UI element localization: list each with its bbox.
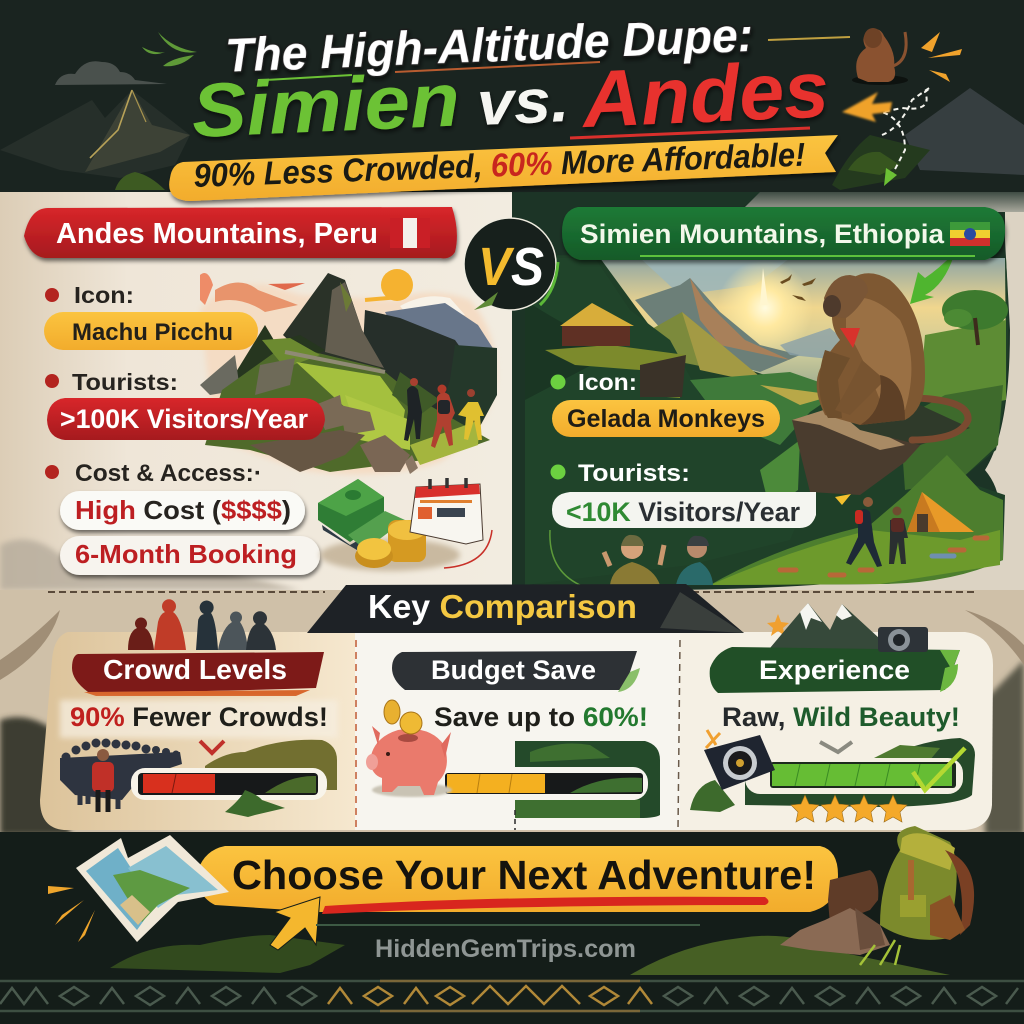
birds: [780, 274, 816, 301]
illustration: people silhouettes: [128, 599, 276, 650]
budget progress bar: [440, 767, 648, 800]
leaf: [225, 790, 285, 817]
crowd progress bar: [131, 768, 327, 800]
call to action banner: [198, 846, 838, 914]
foreground hill: [710, 455, 1003, 585]
right bushes and hill: [920, 320, 1006, 410]
arrow: green pointer: [910, 252, 955, 304]
hut cliff: [545, 345, 686, 398]
icon: small monkey: [852, 28, 908, 85]
VS badge: [464, 218, 558, 310]
stones: [780, 538, 987, 575]
text: Save up to 60%: Save up to 60%!: [434, 702, 648, 732]
illustration: Machu Picchu: [200, 269, 497, 474]
ribbon: Budget Save: [392, 651, 640, 692]
icon: camera: [704, 730, 775, 790]
icon: hut: [560, 303, 634, 326]
pill text: 6-Month Booking: [75, 539, 297, 569]
Simien header text: Simien Mountains, Ethiopia: [580, 219, 945, 249]
icon: Ethiopia flag: [950, 222, 990, 246]
left hillside: [525, 258, 840, 585]
title word: vs.: vs.: [476, 66, 571, 139]
hikers Simien: [835, 494, 908, 567]
icon: coins: [355, 520, 426, 568]
bullet: [45, 465, 59, 479]
terraces: [205, 345, 490, 472]
right panel top haze: [740, 192, 1024, 212]
stone ruins: [315, 395, 375, 435]
footer background: [0, 832, 1024, 1024]
ribbon text: 90% Less Crowded, 60% More Affordable!: [193, 136, 806, 194]
text backdrop: [60, 700, 338, 738]
text: Tourists Simien: [550, 460, 690, 487]
pill: Gelada Monkeys: [552, 400, 780, 437]
tree: [942, 290, 1008, 345]
label: Cost and Access: Cost & Access:·: [75, 460, 262, 487]
icon: cash stack: [318, 479, 460, 571]
Key Comparison banner: [307, 584, 744, 633]
sun: [717, 260, 813, 356]
title: Simien vs. Andes: [190, 44, 831, 154]
illustration: Simien landscape: [525, 252, 1008, 586]
pill: 6-Month Booking: [60, 536, 320, 575]
guides: [604, 535, 713, 585]
decorative title accent strokes: [266, 37, 850, 138]
pill text: High Cost ($$$$): [75, 495, 291, 525]
ribbon text: Experience: [759, 655, 910, 685]
rock ledge: [792, 405, 925, 495]
arrow: yellow pointer: [270, 897, 320, 950]
divider line: [316, 924, 700, 926]
ribbon text: Budget Save: [431, 655, 596, 685]
leaves: [690, 780, 735, 812]
monkey tail: [912, 398, 968, 440]
ribbon text: Crowd Levels: [103, 654, 287, 685]
panel: Simien Mountains: [525, 207, 1008, 586]
title word: Andes: Andes: [579, 44, 831, 144]
icon: Peru flag: [390, 218, 430, 248]
hill backdrop: [745, 738, 975, 807]
icon: gelada monkey: [817, 273, 925, 425]
pill text: Gelada Monkeys: [567, 405, 765, 433]
right panel paper edge: [640, 200, 1024, 590]
icon: backpack and rocks: [780, 826, 974, 965]
label: Tourists: Tourists:: [72, 369, 178, 395]
text: Icon: [45, 282, 134, 308]
bullet: [550, 374, 566, 390]
left panel faded mountains: [0, 539, 300, 590]
far mountains: [635, 278, 800, 372]
header decoration: left mountains and cloud: [0, 32, 197, 190]
text: Cost and Access: [45, 460, 262, 487]
icon: gold coins: [384, 700, 422, 734]
Andes header banner: [24, 207, 457, 258]
rating stars: [791, 795, 907, 822]
website text: HiddenGemTrips.com: [375, 935, 636, 963]
Huayna Picchu peak: [283, 273, 385, 370]
left panel background: [0, 192, 512, 590]
icon: star: [767, 614, 789, 636]
bullet: [45, 288, 59, 302]
camp tent: [907, 492, 974, 532]
comparison section side mountains: [0, 610, 1024, 835]
text: Tourists: [45, 369, 178, 395]
card: Experience: [678, 603, 993, 830]
icon: check mark: [913, 748, 965, 790]
icon: folded map: [76, 835, 229, 942]
label: Icon: Icon:: [578, 369, 637, 395]
yellow headline ribbon: [169, 135, 838, 201]
Simien header banner: [562, 207, 1005, 260]
pill: visitors Andes: [47, 398, 325, 440]
sky: [600, 258, 1006, 400]
icon: orange burst and arrow: [842, 32, 962, 122]
banner text: Key Comparison: [368, 588, 637, 625]
icon: small camera: [878, 627, 928, 652]
header decoration: right mountain, foliage and dashed trail: [832, 88, 1024, 190]
hill backdrop: [205, 740, 337, 790]
bullet: [550, 464, 566, 480]
label: Icon: Icon:: [74, 282, 134, 308]
label: Tourists: Tourists:: [578, 460, 690, 487]
figure: red hiker: [92, 749, 114, 812]
pill text: >100K Visitors/Year: [60, 404, 308, 434]
pill text: Machu Picchu: [72, 319, 233, 346]
ribbon: Crowd Levels: [72, 652, 324, 696]
hikers: [404, 378, 484, 448]
hill backdrop: [515, 741, 660, 818]
call to action text: Choose Your Next Adventure!: [232, 852, 816, 898]
icon: piggy bank: [366, 726, 452, 797]
ribbon: Experience: [710, 647, 960, 693]
card: Budget Save: [355, 632, 680, 830]
title: The High-Altitude Dupe: The High-Altitude Dupe:: [224, 8, 754, 82]
experience progress bar: [745, 758, 963, 794]
illustration: mountain peaks: [770, 603, 892, 650]
dashed separators: [48, 591, 975, 593]
text: 90% Fewer Crowds headline: 90% Fewer Crowds!: [70, 702, 328, 732]
Andes header text: Andes Mountains, Peru: [56, 218, 378, 250]
text: Raw, Wild Beauty: Raw, Wild Beauty!: [722, 702, 960, 732]
clouds and sun: [200, 269, 465, 318]
footer moss hills: [110, 935, 950, 975]
crowd: [60, 738, 182, 809]
comparison section background: [0, 590, 1024, 835]
pill: Machu Picchu: [44, 312, 258, 350]
card: Crowd Levels: [40, 599, 356, 830]
map sparks: [48, 886, 95, 942]
title word: Simien: Simien: [190, 57, 461, 154]
panel: Key Comparison cards: [40, 599, 993, 830]
right panel background: [512, 192, 1024, 590]
panel: Andes Mountains: [24, 207, 497, 575]
pill: High Cost: [60, 491, 305, 530]
icon: booking calendar: [410, 478, 492, 568]
tribal border pattern: [0, 981, 1024, 1011]
far mountains: [385, 303, 494, 400]
bullet: [45, 374, 59, 388]
text: Icon Simien: [550, 369, 637, 395]
pill text: <10K Visitors/Year: [566, 497, 800, 527]
VS text: VS: [478, 237, 544, 297]
pill: visitors Simien: [552, 492, 816, 528]
